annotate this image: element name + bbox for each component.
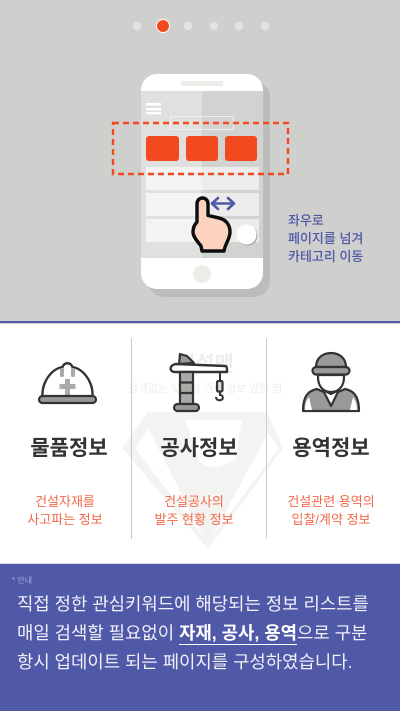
text: 용역정보 description <box>287 494 375 527</box>
dashed selection frame <box>113 123 288 174</box>
icon: left-right arrow <box>212 198 234 209</box>
text: 물품정보 description <box>27 494 103 527</box>
swipe caption: 페이지를 넘겨 <box>288 231 363 246</box>
text: 용역정보 description: 건설관련 용역의 <box>287 494 375 509</box>
text: 물품정보 description: 건설자재를 <box>35 494 95 509</box>
phone <box>141 74 270 297</box>
heading: 공사정보: 공사정보 <box>160 437 238 460</box>
swipe caption: 좌우로 <box>288 213 324 228</box>
notice body: 직접 정한 관심키워드에 해당되는 정보 리스트를 <box>17 594 369 614</box>
purple divider <box>0 321 400 323</box>
heading: 용역정보: 용역정보 <box>292 437 370 460</box>
text: 공사정보 description: 건설공사의 <box>164 494 224 509</box>
watermark <box>122 353 283 548</box>
notice body: 매일 검색할 필요없이 자재, 공사, 용역으로 구분 <box>17 623 367 643</box>
touch circle <box>236 224 258 246</box>
swipe caption: 카테고리 이동 <box>288 249 363 264</box>
text: 공사정보 description <box>154 494 233 527</box>
notice label: * 안내 <box>12 576 32 585</box>
pagination dots <box>133 20 269 32</box>
text: 공사정보 description: 발주 현황 정보 <box>154 512 233 527</box>
column dividers <box>131 338 267 539</box>
icon: pointing hand <box>193 198 230 251</box>
icon: helmet <box>38 362 98 404</box>
panel: notice <box>0 563 400 711</box>
notice body: 항시 업데이트 되는 페이지를 구성하였습니다. <box>17 652 353 672</box>
text: 용역정보 description: 입찰/계약 정보 <box>292 512 370 527</box>
watermark: 건설맨 <box>176 353 234 376</box>
icon: worker <box>302 352 360 412</box>
text: 물품정보 description: 사고파는 정보 <box>27 512 103 527</box>
watermark: 검색없는 맞춤형 건설 정보 알림 앱 <box>128 383 282 395</box>
notice body <box>17 594 369 672</box>
panel: phone illustration <box>0 0 400 324</box>
underline for highlighted words <box>179 644 297 645</box>
icon: crane <box>169 352 228 412</box>
heading: 물품정보: 물품정보 <box>30 437 108 460</box>
swipe caption <box>288 213 363 264</box>
